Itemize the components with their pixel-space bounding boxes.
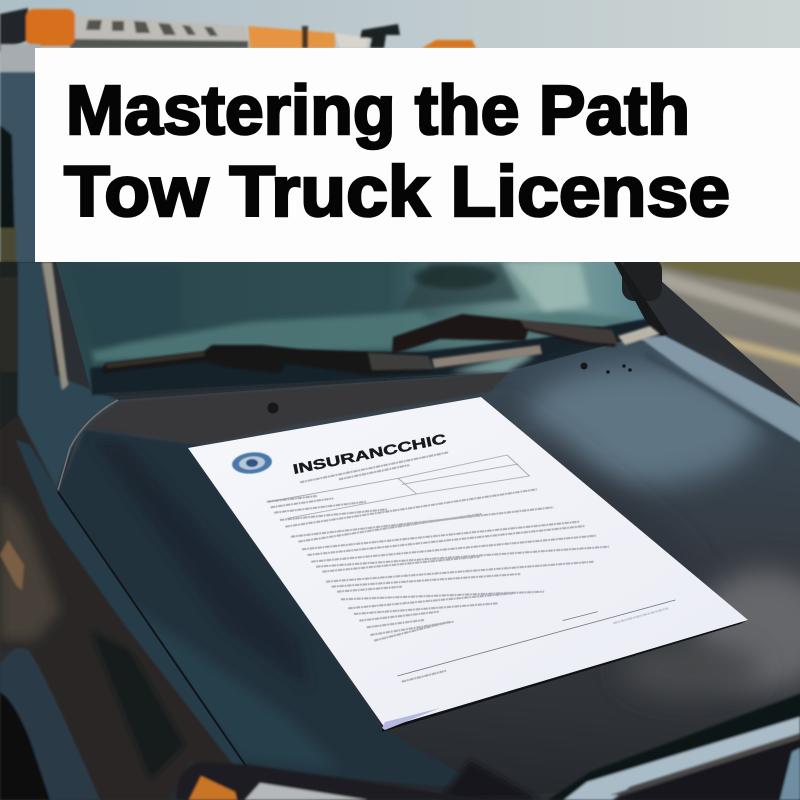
left hood teal [58, 430, 490, 790]
hood [58, 334, 800, 797]
document form box [269, 455, 529, 518]
dark patch beneath paper [440, 760, 540, 800]
title banner [35, 48, 800, 262]
headlight lens [245, 783, 368, 800]
document shadow edge [382, 620, 748, 732]
document heading: INSURANCCHIC [292, 432, 448, 477]
left wiper [102, 345, 434, 375]
teal trim along seam [16, 440, 250, 770]
a-pillar and door frame [0, 262, 118, 490]
hood shading [58, 336, 800, 800]
headlight [176, 762, 490, 800]
truck body base [0, 262, 800, 800]
chrome bar [564, 717, 800, 800]
blue sheen right [520, 365, 760, 485]
dark near paper [490, 395, 748, 620]
document seal [231, 450, 273, 476]
door handle [0, 540, 24, 590]
insurance document [188, 397, 748, 730]
lighter strip along hood edge [640, 336, 800, 448]
windshield reflections [70, 262, 640, 362]
document form and body lines [267, 452, 668, 682]
left hood dark band [90, 437, 310, 690]
amber beacon right [422, 40, 476, 48]
wiper arm silver bar [432, 345, 542, 368]
silver bar [70, 15, 248, 48]
amber beacon left [26, 9, 75, 46]
turn signal [189, 776, 237, 800]
rack frame [0, 8, 28, 52]
hood seam [58, 492, 250, 772]
bar slots [86, 20, 218, 36]
windshield [56, 262, 660, 395]
lower right silver glow [695, 570, 800, 690]
left fender [0, 415, 250, 800]
sky background [0, 0, 800, 270]
right wiper [392, 314, 618, 353]
fender brown reflection [0, 490, 60, 640]
black hook [360, 24, 400, 48]
grille and chrome [548, 690, 800, 800]
hood chrome strut [58, 400, 118, 490]
lower centre teal light [110, 590, 340, 770]
hood trim edge [618, 326, 660, 345]
hood ridge [645, 354, 800, 448]
paper sheet [188, 397, 748, 728]
title line one: Mastering the Path [66, 71, 690, 149]
fender dark reflection [90, 630, 185, 780]
cowl panel [85, 372, 510, 444]
side mirror [622, 258, 662, 301]
road behind the truck [600, 255, 800, 420]
dashboard reflection on lower glass [450, 352, 535, 374]
title line two: Tow Truck License [64, 153, 730, 232]
pillar black trim [614, 262, 668, 338]
paper stack edge [382, 708, 440, 730]
orange section [248, 26, 335, 48]
dark glass band [90, 318, 660, 395]
lower hood glow [620, 642, 760, 698]
hood dust specks [268, 362, 632, 414]
signature rule [397, 600, 675, 676]
chrome emblem [780, 748, 800, 800]
banner panel [35, 48, 800, 262]
cab pillar on the left [0, 44, 40, 268]
roof light bar [0, 8, 476, 52]
wheel arch [0, 648, 100, 800]
